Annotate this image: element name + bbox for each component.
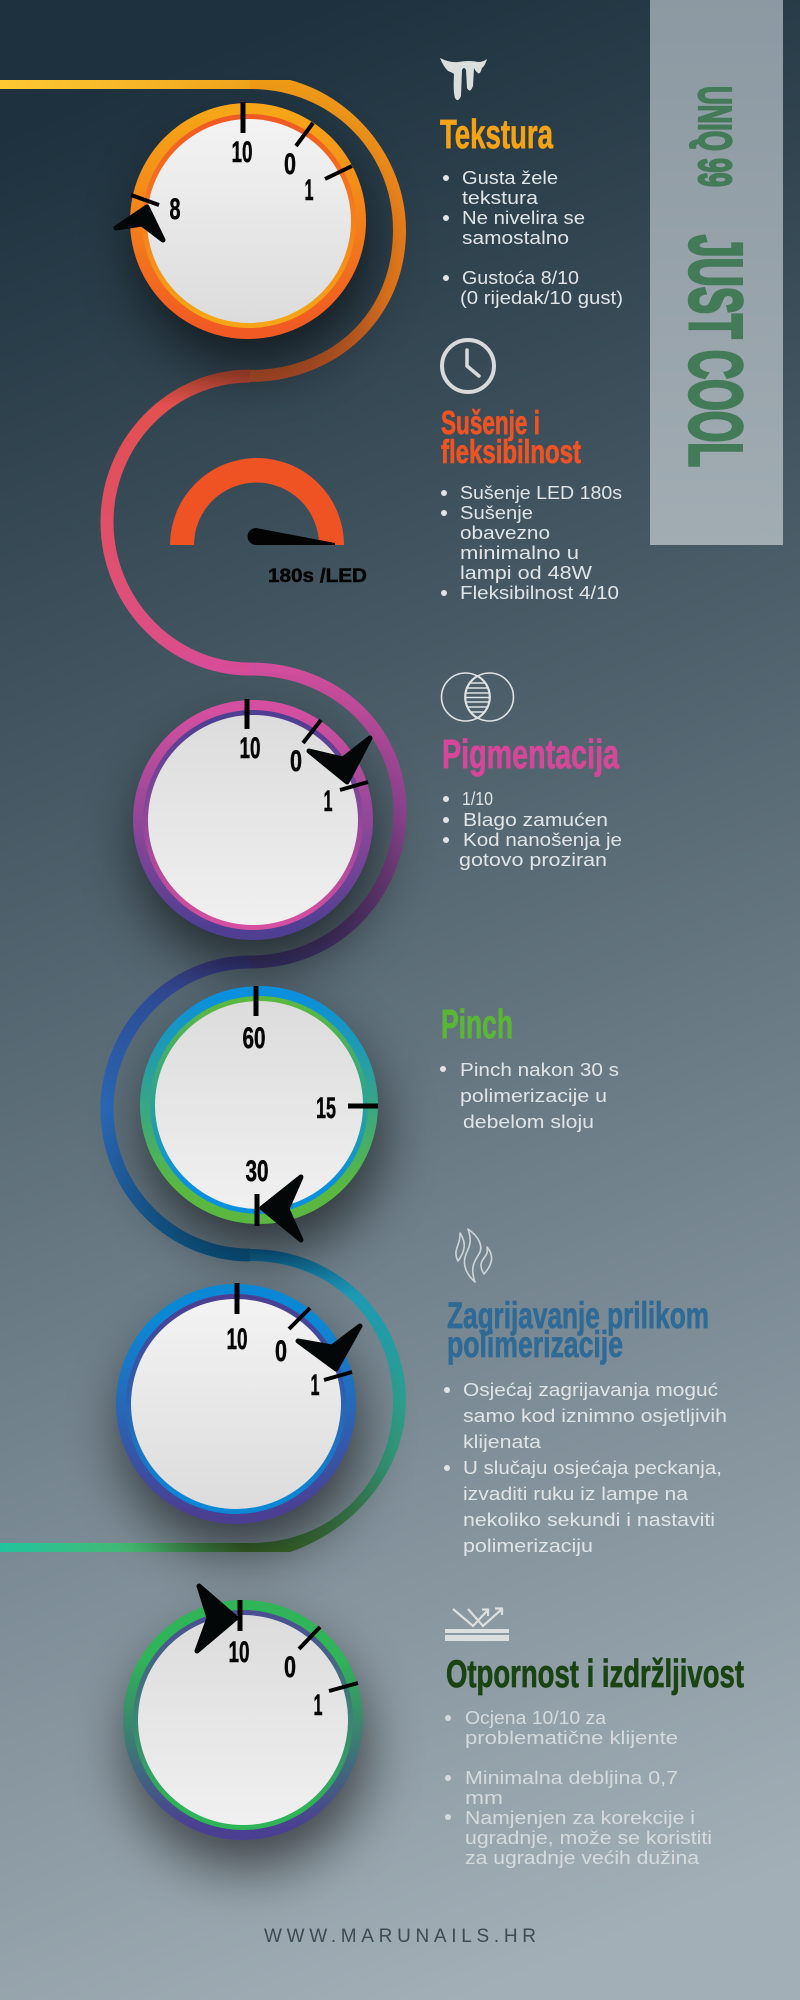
text block: resistance: ugradnje, može se koristiti [465,1828,712,1848]
text block: texture: Gusta žele [462,168,558,188]
text block: resistance: Namjenjen za korekcije i [465,1808,695,1828]
icon: dripping gel [440,58,487,100]
gauge: 180s LED [170,458,367,587]
dial: heating 1 of 10 [116,1283,361,1553]
dial: pigmentation 1 of 10 [133,699,376,969]
heading: drying and flexibility: Sušenje i [441,404,540,441]
dial: heating 1 of 10: 0 [275,1335,287,1368]
text block: pigmentation: Kod nanošenja je [463,830,622,850]
text block: pigmentation: gotovo proziran [459,850,607,870]
dial: pinch 30 seconds [140,986,383,1253]
heading: heating during curing [447,1295,709,1365]
dial: texture 8 of 10 [116,102,372,368]
dial: resistance 10 of 10: 0 [284,1651,296,1684]
text block: heating [444,1380,727,1556]
text block: pinch [440,1060,619,1132]
text block: resistance: Minimalna debljina 0,7 [465,1768,678,1788]
text block: resistance: za ugradnje većih dužina [465,1848,700,1868]
dial: texture 8 of 10: 0 [284,148,296,181]
dial: texture 8 of 10: 10 [232,136,252,169]
text block: texture: Ne nivelira se [462,208,585,228]
side panel with product name [650,0,783,545]
icon: heat waves [456,1229,492,1282]
icon: resistance surface with deflected arrows [445,1608,509,1641]
text block: heating: samo kod iznimno osjetljivih [463,1406,727,1426]
dial: resistance 10 of 10 [123,1586,368,1869]
serpentine coloured line [0,80,406,1552]
icon: overlapping circles [442,673,514,721]
text block: drying: obavezno [460,523,550,543]
text block: heating: klijenata [463,1432,542,1452]
text block: resistance: problematične klijente [465,1728,678,1748]
text block: heating: polimerizaciju [463,1536,593,1556]
dial: resistance 10 of 10: 10 [228,1636,250,1669]
heading: Pigmentacija: Pigmentacija [442,731,620,777]
text block: texture: samostalno [462,228,569,248]
text block: pigmentation: Blago zamućen [463,810,608,830]
text block: drying [441,483,622,603]
text block: texture: (0 rijedak/10 gust) [460,288,623,308]
dial: texture 8 of 10: 8 [170,193,180,226]
text block: resistance: mm [465,1788,503,1808]
text block: heating: U slučaju osjećaja peckanja, [463,1458,722,1478]
dial: pinch 30 seconds: 30 [246,1155,268,1188]
text block: pinch: Pinch nakon 30 s [460,1060,619,1080]
dial: pinch 30 seconds: 60 [242,1022,266,1055]
text block: pigmentation: 1/10 [462,789,493,809]
dial: heating 1 of 10: 1 [310,1369,320,1402]
product name: JUST COOL [674,235,757,467]
heading: heating during curing: polimerizacije [447,1324,623,1365]
product line label: UNIQ 99 [689,86,741,187]
dial: heating 1 of 10: 10 [226,1323,248,1356]
dial: pigmentation 1 of 10: 0 [290,745,302,778]
heading: Pinch: Pinch [441,1001,513,1047]
text block: drying: lampi od 48W [460,563,592,583]
text block: drying: Sušenje LED 180s [460,483,622,503]
dial: texture 8 of 10: 1 [304,174,314,207]
text block: texture: tekstura [462,188,539,208]
text block: pinch: polimerizacije u [460,1086,607,1106]
text block: heating: Osjećaj zagrijavanja moguć [463,1380,718,1400]
text block: drying: Sušenje [460,503,533,523]
text block: pigmentation [443,789,622,870]
dial: resistance 10 of 10: 1 [314,1689,322,1722]
icon: clock [442,340,494,392]
dial: pinch 30 seconds: 15 [316,1092,336,1125]
text block: resistance [445,1708,712,1868]
text block: heating: nekoliko sekundi i nastaviti [463,1510,715,1530]
text block: drying: Fleksibilnost 4/10 [460,583,619,603]
text block: heating: izvaditi ruku iz lampe na [463,1484,689,1504]
text block: pinch: debelom sloju [463,1112,594,1132]
text block: texture: Gustoća 8/10 [462,268,579,288]
heading: drying and flexibility [441,404,581,470]
heading: drying and flexibility: fleksibilnost [441,433,581,470]
heading: Tekstura: Tekstura [440,111,554,157]
footer website: WWW.MARUNAILS.HR [264,1926,536,1947]
gauge: 180s LED: 180s /LED [268,566,367,587]
text block: drying: minimalno u [460,543,579,563]
dial: pigmentation 1 of 10: 10 [240,732,260,765]
text block: texture [443,168,623,308]
text block: resistance: Ocjena 10/10 za [465,1708,607,1728]
dial: pigmentation 1 of 10: 1 [324,785,332,818]
